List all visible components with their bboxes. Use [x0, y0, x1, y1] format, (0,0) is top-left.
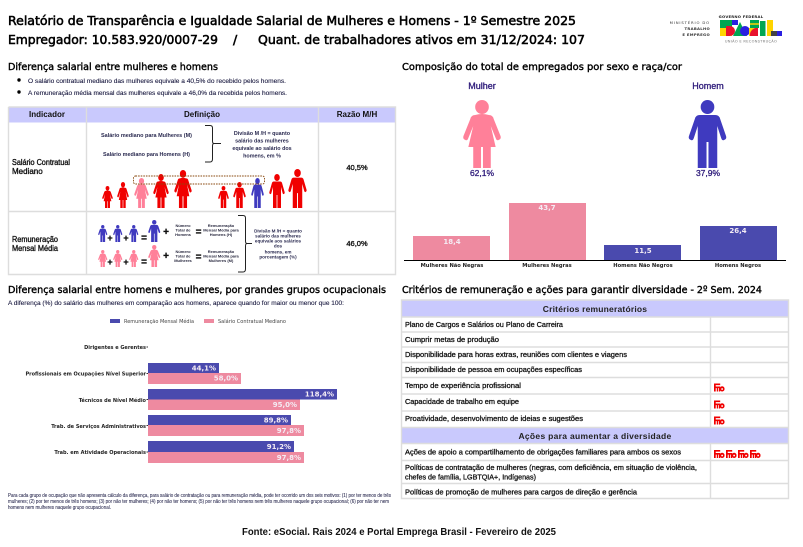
row: remuneração mensal média: Número [175, 249, 191, 254]
bar chart: composição por sexo e raça [404, 203, 786, 269]
icon: homem: 37,9% [696, 168, 720, 178]
logo: ministério e governo federal: UNIÃO E RECONSTRUÇÃO [725, 38, 777, 44]
title: Empregador: 10.583.920/0007-29 [8, 32, 218, 47]
row: remuneração mensal média: Remuneração [208, 223, 235, 228]
bar chart: grupos ocupacionais: Trab. em Atividade Operacionais [54, 450, 146, 456]
row: remuneração mensal média: 46,0% [346, 239, 368, 248]
icon: mulher: 62,1% [470, 168, 494, 178]
panel: critérios e ações: Políticas de promoção de mulheres para cargos de direção e gerência [405, 488, 638, 496]
panel: critérios e ações [402, 300, 788, 498]
icon: homem [689, 81, 726, 178]
bar chart: composição por sexo e raça: 26,4 [729, 227, 747, 235]
bar chart: composição por sexo e raça: Mulheres Não Negras [421, 263, 483, 269]
logo: ministério e governo federal: E EMPREGO [682, 32, 710, 37]
row: remuneração mensal média: dos [274, 244, 283, 248]
panel: tabela de indicadores [8, 107, 396, 274]
row: remuneração mensal média: Mulheres [174, 258, 193, 263]
footnote [8, 493, 391, 511]
bar chart: composição por sexo e raça: 11,5 [634, 247, 652, 255]
bar chart: grupos ocupacionais: 97,8% [277, 427, 301, 435]
row: remuneração mensal média: salário das mulheres [255, 234, 301, 238]
row: remuneração mensal média: Número [175, 223, 191, 228]
panel: tabela de indicadores: Indicador [29, 110, 65, 119]
title: Relatório de Transparência e Igualdade Salarial de Mulheres e Homens - 1º Semestre 2025 [8, 13, 576, 28]
icon: mulher [463, 81, 501, 178]
row: salário contratual mediano: equivale ao salário dos [232, 146, 292, 152]
row: remuneração mensal média: Divisão M /H = quanto [254, 228, 302, 234]
bar chart: grupos ocupacionais: 95,0% [273, 401, 297, 409]
bar chart: composição por sexo e raça: 43,7 [538, 204, 556, 212]
panel: critérios e ações: Cumprir metas de produção [405, 335, 499, 344]
bar chart: grupos ocupacionais: 89,8% [264, 416, 288, 424]
icon: homem: Homem [692, 81, 724, 91]
footnote: Para cada grupo de ocupação que não apresenta cálculo da diferença, para salário de contratação ou para remuneração média, pode ter ocorrido um dos seis motivos: (1) por ter menos de três [8, 493, 391, 499]
icons: critérios marcados [714, 384, 761, 458]
row: salário contratual mediano: Salário Contratual [12, 158, 70, 167]
bar chart: grupos ocupacionais: Trab. de Serviços Administrativos [51, 424, 146, 430]
row: remuneração mensal média: Homens [175, 232, 192, 237]
bullets [17, 78, 287, 97]
row: remuneração mensal média: Homens (H) [210, 232, 233, 237]
bar chart: grupos ocupacionais: 91,2% [267, 443, 291, 451]
source: Fonte: eSocial. Rais 2024 e Portal Emprega Brasil - Fevereiro de 2025 [242, 527, 556, 538]
title [8, 13, 585, 47]
heading: diferença salarial: Diferença salarial entre mulheres e homens [8, 62, 218, 73]
row: remuneração mensal média: Remuneração [208, 249, 235, 254]
row: remuneração mensal média: Total de [175, 228, 191, 232]
row: remuneração mensal média: Mensal Média para [203, 228, 240, 232]
panel: critérios e ações: Critérios remuneratórios [543, 304, 647, 314]
row: remuneração mensal média [12, 216, 368, 272]
row: salário contratual mediano: Salário mediano para Mulheres (M) [101, 133, 192, 139]
bar chart: grupos ocupacionais: 118,4% [305, 390, 334, 398]
subtitle: grupos ocupacionais: A diferença (%) do salário das mulheres em comparação aos homens, aparece quando for maior ou menor que 100: [8, 300, 344, 307]
bar chart: composição por sexo e raça: 18,4 [443, 238, 461, 246]
panel: critérios e ações: Plano de Cargos e Salários ou Plano de Carreira [405, 320, 564, 329]
row: remuneração mensal média: equivale aos salários [255, 238, 302, 244]
row: remuneração mensal média: = [141, 257, 147, 268]
bar chart: grupos ocupacionais: Técnicos de Nível Médio [79, 397, 147, 404]
bar chart: grupos ocupacionais [25, 345, 337, 463]
logo: ministério e governo federal: GOVERNO FEDERAL [719, 14, 764, 19]
logo: ministério e governo federal: TRABALHO [684, 26, 710, 31]
row: salário contratual mediano: homens, em % [243, 154, 281, 160]
panel: critérios e ações: Ações de apoio a compartilhamento de obrigações familiares para ambos os sexos [405, 448, 681, 456]
panel: critérios e ações: Disponibilidade para horas extras, reuniões com clientes e viagens [405, 350, 627, 359]
logo: ministério e governo federal [670, 14, 782, 44]
row: remuneração mensal média: + [107, 233, 113, 243]
row: salário contratual mediano: salário das mulheres [235, 138, 289, 144]
panel: tabela de indicadores: Razão M/H [337, 110, 377, 119]
legend [110, 318, 286, 325]
panel: critérios e ações: Ações para aumentar a diversidade [518, 431, 672, 441]
footnote: mulheres; (2) por ter menos de três homens; (3) por não ter mulheres; (4) por não ter homens; (5) por não ter três homens nem três mulheres naquele grupo ocupacional; (6) por não ter nem [8, 499, 389, 505]
panel: critérios e ações: Tempo de experiência profissional [405, 381, 521, 390]
legend: Salário Contratual Mediano [218, 318, 286, 325]
row: remuneração mensal média: Mulheres (M) [209, 258, 234, 263]
row: remuneração mensal média: Remuneração [12, 235, 59, 244]
bullets: O salário contratual mediano das mulheres equivale a 40,5% do recebido pelos homens. [28, 78, 286, 85]
heading: composição: Composição do total de empregados por sexo e raça/cor [402, 62, 683, 73]
footnote: homens nem mulheres naquele grupo ocupacional. [8, 505, 111, 511]
row: salário contratual mediano: Mediano [12, 167, 43, 176]
row: salário contratual mediano: 40,5% [346, 163, 368, 172]
title: Quant. de trabalhadores ativos em 31/12/2024: 107 [258, 32, 585, 47]
row: remuneração mensal média: = [196, 252, 202, 263]
row: salário contratual mediano: Salário mediano para Homens (H) [103, 152, 190, 158]
panel: critérios e ações: Proatividade, desenvolvimento de ideias e sugestões [405, 414, 583, 423]
panel: critérios e ações: Políticas de contratação de mulheres (negras, com deficiência, em situação de violência, [405, 463, 697, 472]
bar chart: grupos ocupacionais: Profissionais em Ocupações Nível Superior [25, 370, 147, 378]
panel: tabela de indicadores: Definição [184, 110, 220, 119]
bullets: A remuneração média mensal das mulheres equivale a 46,0% da recebida pelos homens. [28, 90, 287, 97]
logo: ministério e governo federal: MINISTÉRIO DO [670, 20, 710, 25]
row: remuneração mensal média: + [163, 251, 169, 262]
row: remuneração mensal média: = [196, 227, 202, 238]
row: remuneração mensal média: + [163, 227, 169, 238]
row: remuneração mensal média: porcentagem (%) [259, 254, 297, 260]
row: remuneração mensal média: + [123, 233, 129, 243]
bar chart: composição por sexo e raça: Mulheres Negras [522, 263, 572, 269]
panel: critérios e ações: Capacidade de trabalho em equipe [405, 397, 519, 406]
panel: critérios e ações: chefes de família, LGBTQIA+, Indígenas) [405, 472, 536, 482]
panel: critérios e ações: Disponibilidade de pessoa em ocupações específicas [405, 365, 582, 374]
bar chart: composição por sexo e raça: Homens Não Negros [613, 263, 673, 269]
row: remuneração mensal média: Mensal Média [12, 244, 58, 253]
row: remuneração mensal média: homens, em [265, 250, 291, 254]
bar chart: composição por sexo e raça: Homens Negros [715, 263, 761, 269]
bar chart: grupos ocupacionais: Dirigentes e Gerentes [84, 345, 146, 351]
row: remuneração mensal média: + [107, 257, 113, 267]
bar chart: grupos ocupacionais: 58,0% [214, 374, 238, 382]
title: / [233, 32, 238, 47]
heading: critérios: Critérios de remuneração e ações para garantir diversidade - 2º Sem. 2024 [402, 284, 762, 296]
row: remuneração mensal média: + [123, 257, 129, 267]
row: remuneração mensal média: Mensal Média para [203, 254, 240, 258]
row: remuneração mensal média: = [141, 233, 147, 244]
row: remuneração mensal média: Total de [175, 254, 191, 258]
row: salário contratual mediano [12, 126, 368, 208]
icon: mulher: Mulher [468, 81, 496, 91]
row: salário contratual mediano: Divisão M /H = quanto [234, 131, 291, 137]
legend: Remuneração Mensal Média [124, 318, 194, 325]
bar chart: grupos ocupacionais: 97,8% [277, 454, 301, 462]
heading: grupos ocupacionais: Diferença salarial entre homens e mulheres, por grandes grupos ocupacionais [8, 285, 386, 296]
bar chart: grupos ocupacionais: 44,1% [192, 364, 216, 372]
